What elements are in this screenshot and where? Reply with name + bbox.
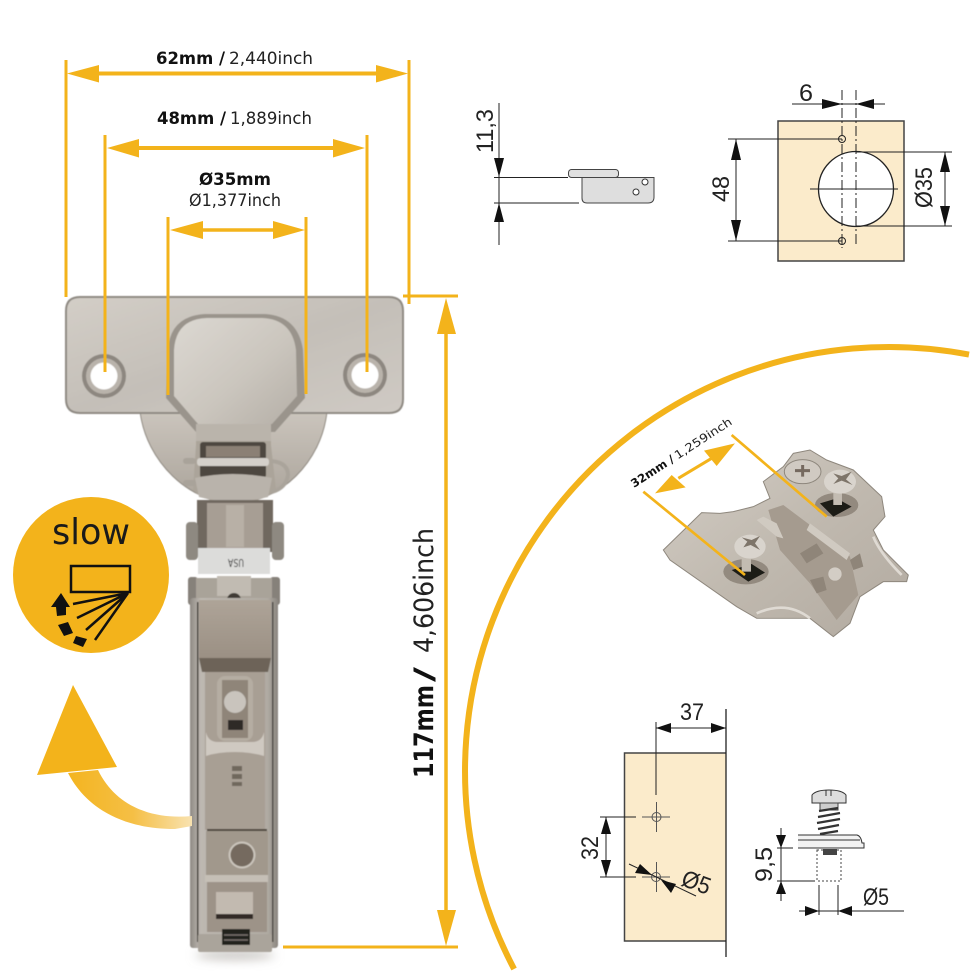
- cup side profile: [568, 170, 654, 203]
- width dimension 62mm: [66, 49, 409, 304]
- dimension diameter 5 bottom: [799, 884, 904, 916]
- dimension diameter 35: Ø35: [911, 167, 938, 208]
- closing dashes: [58, 622, 87, 647]
- label 32mm: 1,259inch: [672, 415, 735, 462]
- dimension diameter 5: Ø5: [678, 865, 714, 901]
- rear fixed screw: [784, 460, 821, 484]
- door rectangle: [71, 566, 130, 592]
- dimension 37: [656, 699, 726, 795]
- hinge photo: [66, 297, 403, 960]
- hole crosshairs: [642, 802, 670, 892]
- hinge round cup backing: [140, 411, 327, 503]
- near screw: [723, 535, 769, 584]
- width dimension 35mm: [168, 170, 306, 395]
- label 62mm: 2,440inch: [229, 49, 313, 69]
- drawing: cup depth 11,3: [472, 103, 654, 245]
- label 117mm: 117mm: [409, 685, 440, 778]
- centre lines: [810, 90, 898, 248]
- spacing lines 32mm: [643, 435, 827, 575]
- height dimension 117mm: [283, 296, 458, 947]
- door panel: [778, 121, 904, 261]
- dimension diameter 35: [856, 152, 952, 226]
- plate centre channel: [768, 505, 858, 620]
- screw: [798, 790, 864, 881]
- width dimension 48mm: [105, 109, 367, 372]
- dimension 37: 37: [680, 699, 704, 726]
- closing rays: [73, 593, 128, 640]
- cup hole: [818, 152, 894, 226]
- screw holes: [838, 136, 846, 244]
- dimension 6: [792, 80, 885, 109]
- hinge clip: [183, 424, 288, 503]
- hinge upper arm: USA: [228, 556, 244, 569]
- drawing: screw section: [751, 790, 904, 916]
- label 32mm: 32mm /: [628, 452, 677, 491]
- left screw hole: [82, 354, 126, 398]
- slow label: slow: [52, 512, 130, 553]
- closing arrow: [51, 593, 70, 616]
- large yellow circle outline: [465, 347, 969, 969]
- hinge main arm body: [190, 598, 278, 952]
- right screw hole: [343, 353, 387, 397]
- label 48mm: 48mm /: [157, 109, 227, 129]
- label 117mm: 4,606inch: [409, 528, 440, 653]
- hinge mounting plate: [66, 297, 403, 413]
- dimension diameter 5 bottom: Ø5: [863, 884, 889, 911]
- label inches: Ø1,377inch: [189, 191, 281, 211]
- icon disc: [13, 497, 169, 653]
- dimension 32: [577, 817, 636, 877]
- dimension 9,5: 9,5: [751, 847, 778, 882]
- dimension 6: 6: [799, 80, 813, 107]
- mounting plate photo: [643, 435, 908, 637]
- slow icon: [13, 497, 169, 653]
- label 62mm: 62mm /: [156, 49, 226, 69]
- dimension 32: 32: [577, 836, 604, 860]
- dimension 48: 48: [708, 176, 735, 202]
- plate body: [663, 450, 908, 637]
- curved yellow arrow: [37, 685, 192, 829]
- hinge drop shadow: [195, 950, 275, 960]
- label 117mm: /: [409, 667, 440, 682]
- hinge upper arm: [186, 500, 284, 607]
- dimension diameter 5: [629, 864, 714, 901]
- dimension 9,5: [751, 828, 815, 901]
- side panel: [624, 709, 726, 957]
- label 11,3: 11,3: [472, 109, 499, 153]
- drawing: cup drilling plan: [708, 80, 952, 261]
- label 48mm: 1,889inch: [230, 109, 312, 129]
- label 35mm: Ø35mm: [199, 170, 271, 190]
- drawing: plate drilling plan: [577, 699, 726, 957]
- far screw: [815, 470, 858, 517]
- hinge cup: [166, 314, 305, 432]
- plate lower rib: [757, 537, 902, 618]
- dimension 48: [708, 139, 842, 241]
